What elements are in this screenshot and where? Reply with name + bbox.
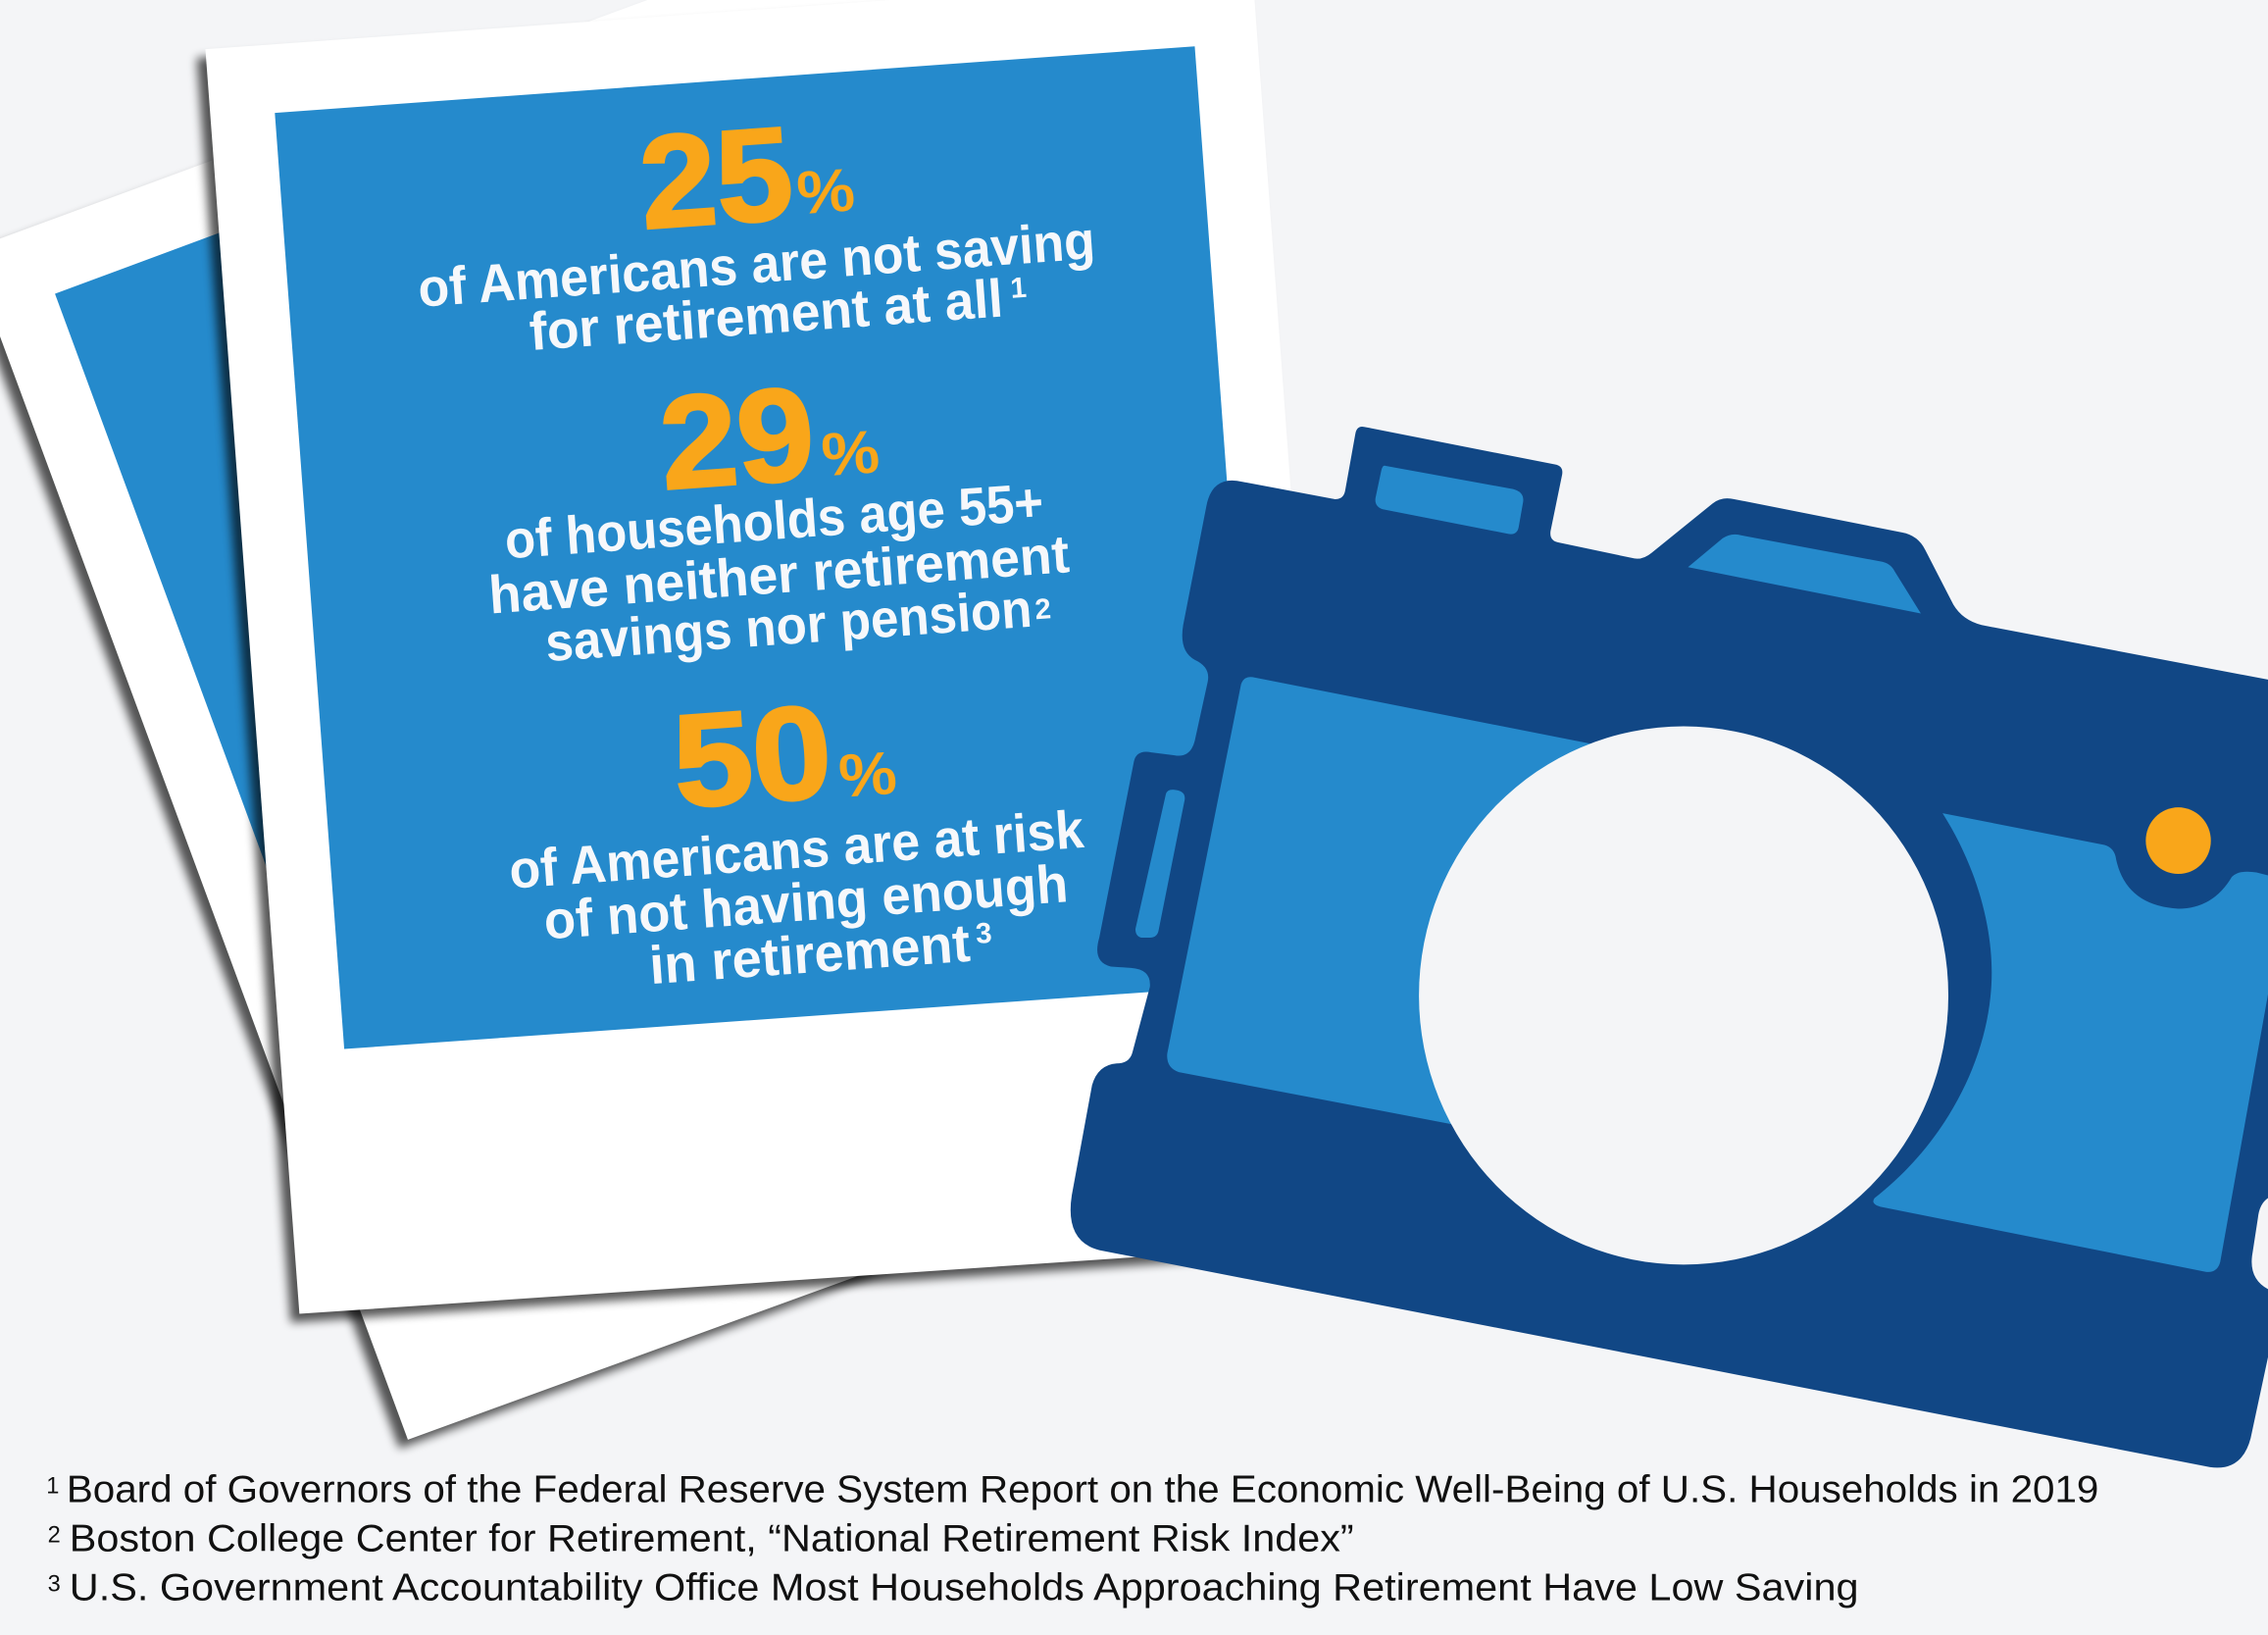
footnote 2: 2	[48, 1523, 61, 1549]
stat: 50 percent: %	[836, 740, 899, 811]
camera viewfinder window	[1376, 466, 1523, 535]
footnotes	[46, 1468, 2098, 1609]
stat: 50 percent: 50	[669, 678, 836, 836]
camera	[1071, 427, 2268, 1467]
stat: 25 percent: 1	[1009, 272, 1028, 305]
footnote 2: Boston College Center for Retirement, “National Retirement Risk Index”	[70, 1517, 1354, 1559]
stat: 29 percent: %	[819, 418, 882, 489]
camera flash button	[2145, 807, 2211, 874]
stat: 50 percent: of Americans are at risk	[507, 799, 1086, 900]
front photo print	[197, 0, 1346, 1322]
stat: 50 percent	[507, 678, 1086, 996]
stat: 29 percent: have neither retirement	[487, 524, 1071, 625]
stat: 25 percent	[416, 99, 1097, 362]
camera body	[1071, 427, 2268, 1467]
stat: 25 percent: for retirement at all	[528, 269, 1005, 362]
footnote 3: 3	[48, 1572, 61, 1598]
camera right panel	[1873, 813, 2268, 1272]
camera left panel	[1167, 677, 1605, 1132]
stat: 25 percent: 25	[635, 99, 797, 257]
stat: 25 percent: %	[794, 156, 857, 228]
camera prism window	[1688, 535, 1921, 613]
back photo print	[0, 0, 1013, 1449]
front photo blue panel	[275, 46, 1264, 1049]
stat: 29 percent: of households age 55+	[503, 472, 1045, 570]
stat: 29 percent: 29	[655, 360, 819, 518]
stat: 29 percent: savings nor pension	[543, 579, 1033, 673]
stat: 29 percent: 2	[1033, 592, 1052, 626]
footnote 3: U.S. Government Accountability Office Most Households Approaching Retirement Have Low Saving	[70, 1567, 1859, 1609]
stat: 25 percent: of Americans are not saving	[416, 210, 1097, 319]
camera lens	[1419, 727, 1948, 1264]
stat: 50 percent: in retirement	[647, 913, 972, 996]
footnote 1: Board of Governors of the Federal Reserve System Report on the Economic Well-Being of U.S. Households in 2019	[67, 1468, 2098, 1510]
stat: 29 percent	[487, 360, 1071, 673]
camera strap slot	[1135, 790, 1184, 938]
stat: 50 percent: 3	[975, 917, 993, 950]
footnote 1: 1	[46, 1473, 59, 1499]
stat: 50 percent: of not having enough	[542, 853, 1070, 950]
